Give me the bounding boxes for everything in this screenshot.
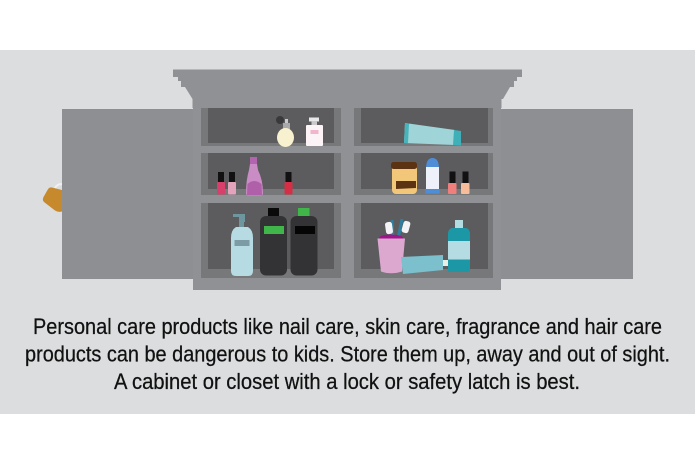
panel: top left shelf: [201, 108, 341, 147]
panel: bottom left shelf: [201, 203, 341, 278]
icon: perfume atomizer: [276, 116, 294, 147]
icon: skin cream tube: [404, 123, 461, 146]
panel: bottom right shelf: [354, 203, 493, 278]
panel: top right shelf: [354, 108, 493, 146]
icon: red nail polish: [217, 172, 225, 194]
icon: toothpaste tube: [401, 255, 448, 274]
icon: red nail polish 2: [284, 172, 292, 194]
text block: [25, 314, 670, 394]
right cabinet door: [501, 109, 633, 279]
icon: pink nail polish: [228, 172, 236, 194]
icon: perfume bottle: [306, 118, 323, 146]
icon: lotion pump bottle: [231, 214, 253, 276]
cabinet body: [173, 70, 522, 290]
icon: cream jar: [391, 162, 417, 194]
panel: middle right shelf: [354, 153, 493, 195]
icon: black shampoo bottle: [260, 208, 287, 276]
icon: toothbrush cup: [378, 219, 411, 273]
left cabinet door: [62, 109, 194, 279]
icon: padlock: [43, 184, 62, 212]
icon: deodorant: [426, 158, 440, 194]
icon: purple nail polish remover: [246, 157, 263, 196]
panel: middle left shelf: [201, 153, 341, 196]
background panel: [0, 50, 695, 414]
icon: peach nail polish: [461, 172, 470, 194]
icon: coral nail polish: [448, 172, 456, 194]
icon: mouthwash bottle: [448, 220, 470, 272]
icon: black conditioner bottle: [290, 208, 318, 276]
text block: A cabinet or closet with a lock or safety latch is best.: [114, 369, 580, 394]
